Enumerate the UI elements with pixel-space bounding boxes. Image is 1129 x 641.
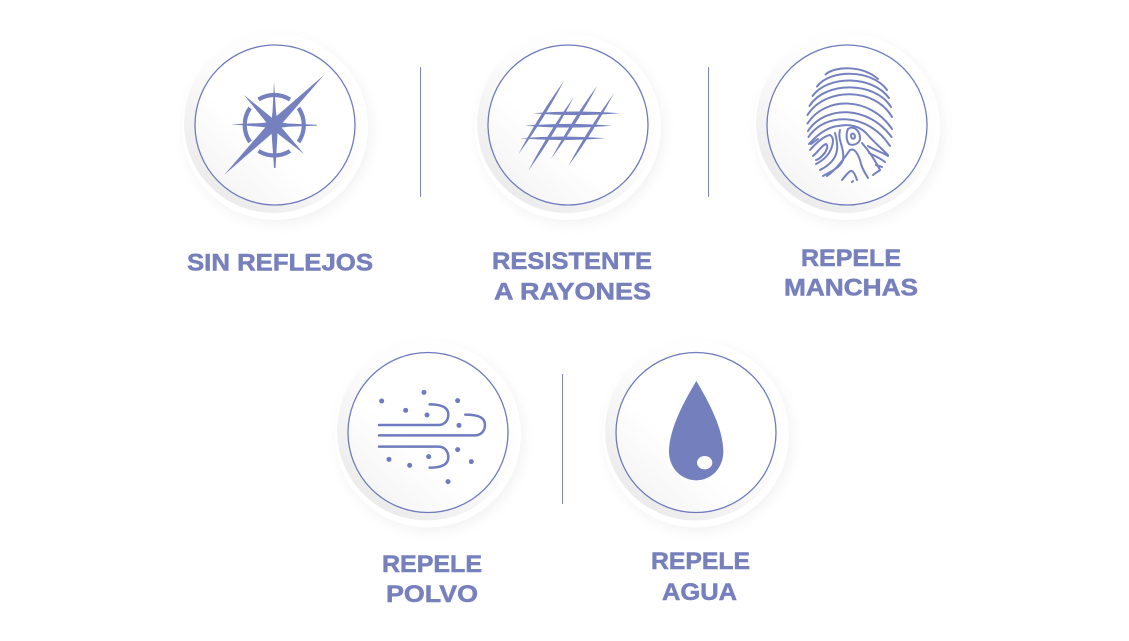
circular badge — [603, 340, 792, 532]
panel: repele agua — [603, 340, 792, 606]
label: REPELE — [651, 548, 750, 575]
label: SIN REFLEJOS — [187, 250, 373, 276]
label: REPELE — [382, 551, 482, 578]
panel: repele polvo: POLVO — [386, 581, 478, 608]
circular badge — [182, 33, 371, 224]
panel: repele polvo — [335, 340, 524, 608]
panel: repele manchas — [754, 33, 943, 302]
divider — [708, 67, 709, 197]
circular badge — [475, 33, 664, 224]
icon: wind and dust — [379, 390, 485, 484]
panel: repele agua: AGUA — [662, 579, 737, 606]
divider — [420, 67, 421, 197]
label: REPELE — [801, 245, 901, 272]
divider — [562, 374, 563, 504]
icon: scratches — [518, 81, 620, 171]
label: RESISTENTE — [492, 248, 652, 275]
panel: sin reflejos — [182, 33, 373, 276]
icon: compass star — [224, 75, 324, 175]
circular badge — [335, 340, 524, 532]
panel: resistente a rayones: A RAYONES — [494, 278, 651, 306]
circular badge — [754, 33, 943, 224]
panel: repele manchas: MANCHAS — [784, 274, 918, 302]
icon: fingerprint — [808, 68, 892, 182]
icon: water drop — [669, 381, 723, 480]
panel: resistente a rayones — [475, 33, 664, 306]
